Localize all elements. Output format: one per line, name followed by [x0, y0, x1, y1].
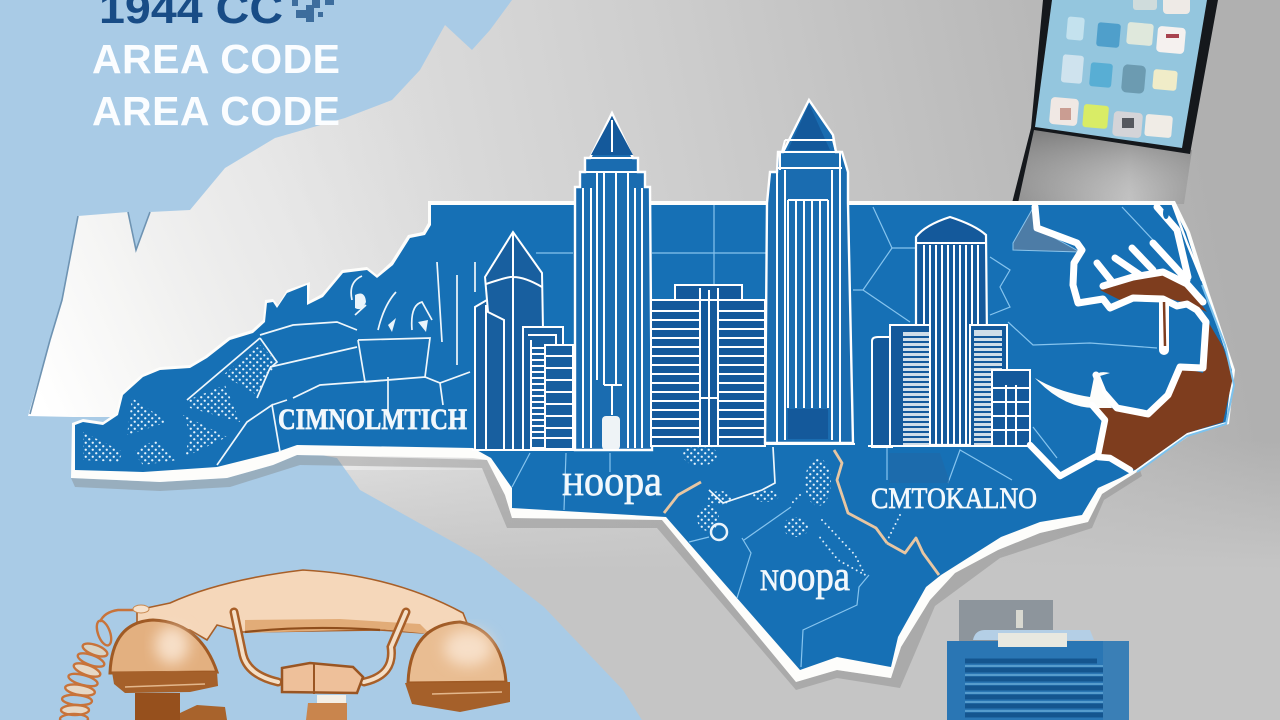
- coast line: [30, 212, 150, 414]
- lower background tone: [0, 440, 1280, 720]
- skyline: [472, 100, 1030, 450]
- building back panel: [959, 600, 1053, 642]
- ground line: [472, 444, 1030, 450]
- dotted branches: [790, 495, 900, 575]
- building: small left block: [523, 327, 573, 450]
- map shape: [75, 205, 1232, 670]
- state map: [71, 100, 1235, 690]
- handset underside: [245, 619, 430, 634]
- building: second spire tower: [765, 100, 853, 443]
- small ring mark: [711, 524, 727, 540]
- building: far left tower: [475, 232, 543, 450]
- far-left block: [872, 337, 892, 447]
- map shadow: [71, 455, 1142, 690]
- title noise glyphs: [292, 0, 334, 22]
- icon: office building: [947, 600, 1129, 720]
- coast: tapered inlet: [1035, 372, 1112, 408]
- phone: smartphone: [1012, 0, 1218, 204]
- telephone stem: [317, 695, 346, 703]
- label: eastern city: CMTOKALNO: [871, 482, 1037, 515]
- building: tall spire tower: [575, 113, 652, 450]
- cradle centre: [282, 663, 363, 693]
- lower right block: [992, 370, 1030, 446]
- coast: south shoreline: [1030, 405, 1130, 476]
- label: south central town: Hoopa: [562, 459, 662, 505]
- coastal sounds: [1030, 205, 1234, 476]
- right striped panel: [974, 330, 1002, 445]
- mountain glyph marks: [351, 262, 475, 365]
- cord grommet: [133, 605, 149, 613]
- handset arch: [137, 570, 467, 640]
- coiled cord: [60, 610, 135, 720]
- lower white branch: [709, 447, 775, 503]
- coast: oval inlet: [1163, 207, 1169, 219]
- coast: outer bank: [1173, 205, 1202, 280]
- building: domed tower group: [872, 217, 1030, 447]
- area code line two: AREA CODE: [92, 88, 340, 134]
- building name plate: [998, 633, 1067, 647]
- left striped panel: [903, 332, 929, 445]
- label: western city: CIMNOLMTICH: [278, 403, 467, 436]
- phone screen: [1035, 0, 1207, 148]
- app icons: [1049, 0, 1190, 138]
- earpiece right: [405, 622, 510, 712]
- map white border: [71, 201, 1235, 682]
- building louvres: [965, 661, 1103, 715]
- cradle arms: [234, 612, 406, 682]
- phone body: [1012, 125, 1192, 204]
- sound: brown water upper: [1100, 275, 1207, 312]
- central dots: [683, 444, 831, 537]
- right stepped block: [970, 325, 1007, 446]
- mountain ridge detail: [187, 322, 470, 465]
- pale land mass: [0, 60, 520, 470]
- mountain dots: [83, 345, 277, 465]
- water bottom left: [0, 417, 642, 720]
- sound: brown water lower: [1093, 320, 1233, 470]
- coast: mid channel: [1159, 302, 1169, 350]
- title block: [92, 0, 340, 134]
- county lines: [512, 205, 1157, 667]
- phone frame: [1012, 0, 1218, 203]
- icon: retro telephone: [60, 570, 510, 720]
- rivers: [664, 450, 939, 575]
- left stepped block: [890, 325, 930, 446]
- coast: white channels: [1035, 207, 1206, 414]
- label: southern town: Noopa: [760, 554, 850, 600]
- earpiece left: [110, 620, 227, 720]
- coast: upper shoreline and fingers: [1097, 207, 1203, 302]
- building: central block: [651, 285, 765, 446]
- dome tower: [916, 217, 988, 445]
- building body: [947, 641, 1129, 720]
- mountain blobs: [355, 294, 428, 332]
- grey inlet: [1013, 208, 1080, 252]
- area code line one: AREA CODE: [92, 36, 340, 82]
- water top left: [0, 0, 512, 418]
- shaded south-east area: [889, 453, 950, 483]
- coast: light blue rim: [1137, 285, 1234, 472]
